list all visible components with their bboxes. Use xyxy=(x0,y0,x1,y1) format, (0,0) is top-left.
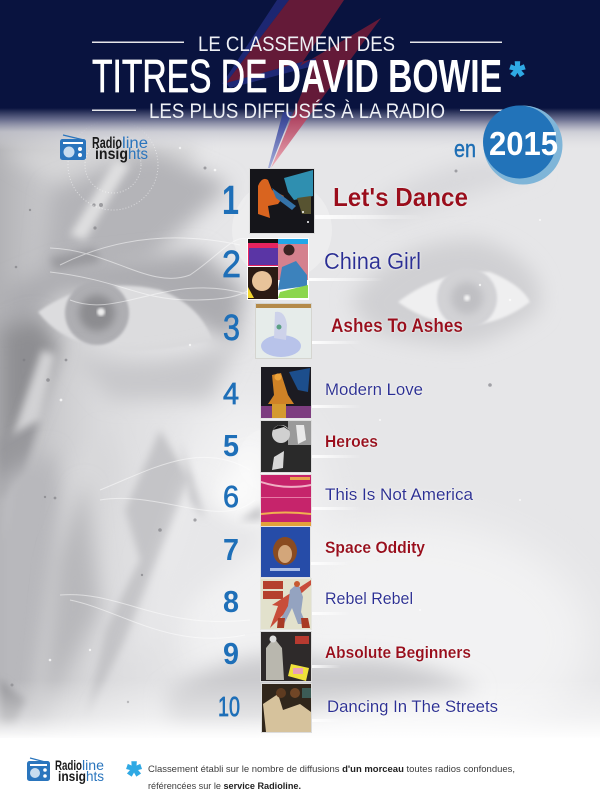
title line one: LE CLASSEMENT DES xyxy=(198,33,395,56)
ranking row 2 xyxy=(222,238,421,300)
album cover: Let's Dance xyxy=(249,168,315,234)
title line two: TITRES DE DAVID BOWIE xyxy=(92,50,502,102)
rank number 4: 4 xyxy=(223,376,239,411)
album cover: Rebel Rebel xyxy=(260,578,312,630)
year badge: en 2015: en xyxy=(454,136,476,163)
ranking row 7 xyxy=(223,526,426,578)
header band xyxy=(0,0,600,150)
ranking row 10 xyxy=(218,683,498,733)
song title: Ashes To Ashes: Ashes To Ashes xyxy=(331,316,463,337)
song title: China Girl: China Girl xyxy=(324,248,421,274)
album cover: Modern Love xyxy=(260,366,312,419)
song title: Absolute Beginners: Absolute Beginners xyxy=(325,643,471,662)
logo: Radioline Insights: line xyxy=(122,135,148,152)
footnote xyxy=(148,764,515,792)
logo: Radioline Insights: Radio xyxy=(92,135,122,152)
song title: Modern Love: Modern Love xyxy=(325,380,423,399)
rank number 6: 6 xyxy=(223,479,239,514)
ranking row 1 xyxy=(222,168,468,234)
album cover: This Is Not America xyxy=(260,474,312,527)
ranking row 6 xyxy=(223,474,474,527)
footer logo: Radioline Insights xyxy=(27,757,104,784)
ranking row 3 xyxy=(223,303,463,359)
rank number 8: 8 xyxy=(223,584,239,619)
rank number 3: 3 xyxy=(223,307,240,348)
footer logo: Radioline Insights: line xyxy=(82,757,104,773)
footer logo: Radioline Insights: Radio xyxy=(55,757,82,773)
rank number 7: 7 xyxy=(223,532,239,567)
song title: Heroes: Heroes xyxy=(325,432,378,451)
logo: Radioline Insights xyxy=(60,135,148,163)
ranking row 8 xyxy=(223,578,413,630)
rank number 9: 9 xyxy=(223,636,239,671)
ranking row 5 xyxy=(223,420,378,473)
album cover: Absolute Beginners xyxy=(260,631,312,682)
year badge: en 2015: 2015 xyxy=(489,125,558,162)
icon: blue asterisk: * xyxy=(510,55,525,97)
logo: Radioline Insights: hts xyxy=(128,146,148,163)
year badge: en 2015 xyxy=(454,106,562,184)
song title: Dancing In The Streets: Dancing In The Streets xyxy=(327,697,498,716)
song title: Space Oddity: Space Oddity xyxy=(325,538,426,557)
album cover: Heroes xyxy=(260,420,312,473)
footnote: référencées sur le service Radioline. xyxy=(148,781,301,792)
album cover: Dancing In The Streets xyxy=(261,683,312,733)
album cover: China Girl xyxy=(247,238,309,300)
ranking row 9 xyxy=(223,631,471,682)
footer logo: Radioline Insights: insig xyxy=(58,768,86,784)
album cover: Space Oddity xyxy=(260,526,311,578)
rank number 10: 10 xyxy=(218,691,240,722)
song title: This Is Not America: This Is Not America xyxy=(325,485,474,504)
rank number 5: 5 xyxy=(223,428,239,463)
icon: footer asterisk: * xyxy=(127,754,141,795)
title line three: LES PLUS DIFFUSÉS À LA RADIO xyxy=(149,100,445,123)
title xyxy=(92,33,525,123)
footnote: Classement établi sur le nombre de diffusions d'un morceau toutes radios confondues, xyxy=(148,764,515,775)
rank number 2: 2 xyxy=(222,244,241,286)
icon: lightning bolt xyxy=(222,0,381,168)
logo: Radioline Insights: insig xyxy=(95,146,128,163)
song title: Let's Dance: Let's Dance xyxy=(333,182,468,212)
song title: Rebel Rebel: Rebel Rebel xyxy=(325,589,413,608)
ranking row 4 xyxy=(223,366,423,419)
rank number 1: 1 xyxy=(222,177,239,223)
album cover: Ashes To Ashes xyxy=(255,303,312,359)
footer logo: Radioline Insights: hts xyxy=(86,768,104,784)
